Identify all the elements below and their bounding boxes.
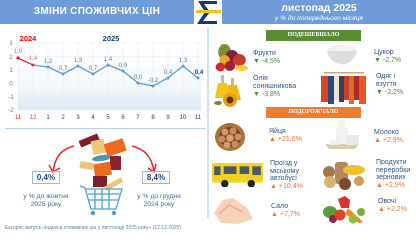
line chart: 0,4 [164, 70, 173, 76]
header band: left title: ЗМІНИ СПОЖИВЧИХ ЦІН [34, 6, 160, 17]
source note: Експрес-випуск «Індекси споживчих цін у листопаді 2025 року» (12.12.2025) [5, 225, 181, 231]
icon: milk [325, 120, 359, 149]
line chart: 2024 [20, 34, 37, 43]
line chart: 1,3 [179, 58, 188, 64]
icon: shopping cart with goods [78, 134, 127, 216]
icon: vegetables [323, 196, 365, 224]
icon: clothes rack [321, 72, 366, 104]
text: bus fare: Проїзд у [270, 160, 297, 167]
panel divider [207, 28, 209, 218]
icon: sugar [327, 45, 357, 64]
line chart: 2 [9, 55, 13, 61]
text: eggs [269, 128, 302, 143]
text: lard: Сало [271, 203, 288, 210]
text: sunflower oil: соняшникова [253, 83, 296, 90]
line chart: 10 [180, 115, 187, 121]
text: grain products: ▲ +2,9% [376, 182, 405, 189]
text: sunflower oil: Олія [253, 75, 268, 82]
text: fruits [253, 50, 280, 65]
line chart: 1,9 [14, 49, 23, 55]
line chart: 0,7 [89, 66, 98, 72]
text: grain products [376, 159, 410, 189]
text: bus fare [270, 160, 303, 190]
heading: cheaper: ПОДЕШЕВШАЛО [288, 32, 339, 38]
line chart: 3 [76, 115, 80, 121]
header band: right title [222, 0, 416, 24]
text: sugar: Цукор [374, 49, 394, 56]
header band: right title: у % до попереднього місяця [275, 15, 363, 22]
arrow: right [132, 145, 157, 174]
text: bus fare: автобусі [270, 175, 297, 182]
text: milk: Молоко [374, 129, 399, 136]
text: clothes and footwear [376, 72, 403, 96]
text: eggs: ▲ +21,6% [269, 136, 302, 143]
text: clothes and footwear: ▼ -2,2% [376, 89, 403, 96]
caption: month change: у % до жовтня [23, 193, 69, 200]
line chart: -1 [8, 95, 14, 101]
text: vegetables: ▲ +2,2% [378, 206, 407, 213]
line chart: 0,0 [134, 75, 143, 81]
line chart: 11 [15, 115, 22, 121]
text: milk [374, 129, 403, 144]
caption: year change [137, 193, 181, 208]
callout: month change: 0,4% [37, 173, 55, 182]
line chart [8, 34, 204, 121]
line chart: 0,4 [195, 70, 204, 76]
text: sugar: ▼ -2,7% [374, 57, 401, 64]
text: fruits: Фрукти [253, 50, 276, 57]
line chart: 0 [9, 82, 13, 88]
logo [196, 1, 221, 24]
text: clothes and footwear: взуття [376, 81, 396, 88]
text: grain products: Продукти [376, 159, 407, 166]
text: sunflower oil [253, 74, 296, 98]
line chart: 2 [61, 115, 65, 121]
text: lard: ▲ +7,7% [271, 211, 300, 218]
text: sunflower oil: ▼ -3,8% [253, 91, 280, 98]
icon: lard [214, 198, 253, 224]
caption: year change: у % до грудня [137, 193, 181, 200]
header band: right title: листопад 2025 [281, 2, 357, 14]
line chart: 12 [30, 115, 37, 121]
heading: more expensive [266, 107, 361, 118]
callout: month change [32, 171, 60, 184]
text: lard [271, 203, 300, 218]
text: eggs: Яйця [269, 128, 286, 135]
line chart: 2025 [103, 34, 119, 43]
text: bus fare: міському [270, 168, 299, 175]
text: fruits: ▼ -4,5% [253, 58, 280, 65]
line chart: 1,4 [104, 57, 113, 63]
icon: eggs basket [215, 123, 245, 151]
icon: sunflower oil [214, 75, 241, 107]
line chart: 5 [106, 115, 110, 121]
line chart: 4 [91, 115, 95, 121]
line chart: 6 [121, 115, 125, 121]
line chart: 1 [46, 115, 50, 121]
text: sugar [374, 49, 401, 64]
icon: fruits [216, 43, 248, 72]
icon: grain products [323, 162, 365, 190]
caption: year change: 2024 року [143, 201, 175, 208]
heading: more expensive: ПОДОРОЖЧАЛО [289, 109, 338, 115]
line chart: 1,2 [44, 59, 53, 65]
text: grain products: зернових [376, 174, 406, 181]
callout: year change [142, 171, 170, 184]
line chart: 1,4 [29, 56, 38, 62]
line chart: -2 [8, 108, 14, 114]
header band: left title [0, 0, 194, 24]
text: bus fare: ▲ +10,4% [270, 183, 303, 190]
text: vegetables: Овочі [378, 198, 396, 205]
arrow: left [48, 145, 74, 173]
line chart: 3 [9, 41, 13, 47]
callout: year change: 8,4% [147, 173, 165, 182]
line chart: 9 [166, 115, 170, 121]
icon: bus [212, 163, 263, 187]
text: vegetables [378, 198, 407, 213]
line chart: 11 [195, 115, 202, 121]
line chart: 7 [136, 115, 140, 121]
caption: month change [23, 193, 69, 208]
line chart: 8 [151, 115, 155, 121]
line chart: 0,7 [59, 66, 68, 72]
line chart: 1 [9, 68, 13, 74]
caption: month change: 2025 року [30, 201, 62, 208]
text: clothes and footwear: Одяг і [376, 73, 395, 80]
section divider [5, 128, 206, 129]
line chart: 1,3 [74, 58, 83, 64]
text: grain products: переробки [376, 167, 410, 174]
line chart: 0,9 [119, 63, 128, 69]
text: milk: ▲ +2,9% [374, 137, 403, 144]
line chart: -0,2 [148, 78, 159, 84]
heading: cheaper [266, 30, 361, 41]
